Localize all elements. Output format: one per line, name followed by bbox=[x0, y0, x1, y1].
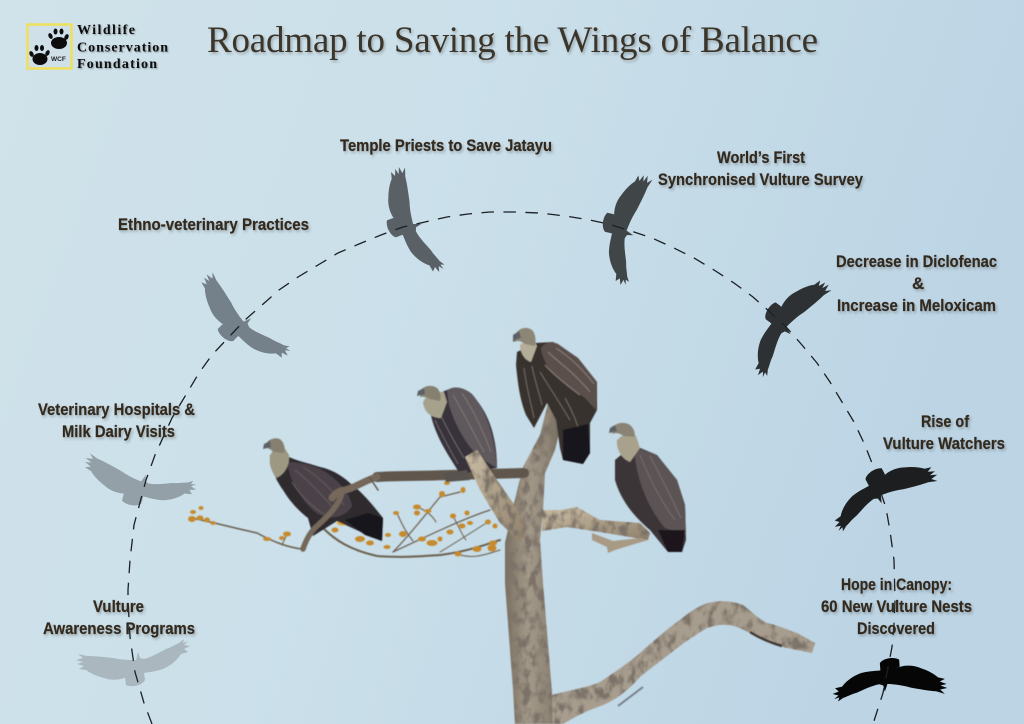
body bbox=[270, 455, 383, 541]
label: Hope in Canopy: Discovered bbox=[857, 619, 935, 638]
flying vulture 1 bbox=[76, 639, 190, 686]
beak bbox=[417, 388, 425, 396]
left horizontal branch bbox=[303, 473, 524, 549]
logo initials: WCF bbox=[51, 56, 66, 63]
wing bbox=[634, 447, 686, 535]
main trunk bbox=[505, 403, 563, 724]
body bbox=[615, 445, 686, 552]
label: Veterinary Hospitals & Milk Dairy Visits: Milk Dairy Visits bbox=[62, 422, 175, 441]
flying vulture 5 bbox=[584, 167, 667, 287]
lower right curved branch bbox=[552, 601, 815, 724]
label: Decrease in Diclofenac & Increase in Meloxicam: Decrease in Diclofenac bbox=[836, 252, 997, 271]
beak bbox=[609, 425, 617, 433]
flying vulture 2 bbox=[76, 439, 199, 527]
flying vulture 6 bbox=[730, 266, 844, 380]
lower fork bbox=[592, 533, 648, 553]
label: Veterinary Hospitals & Milk Dairy Visits: Veterinary Hospitals & bbox=[38, 400, 195, 419]
label: World's First Synchronised Vulture Survey bbox=[658, 148, 863, 189]
tree with perched vultures bbox=[188, 328, 815, 724]
chest streaks bbox=[524, 366, 582, 440]
neck bbox=[520, 336, 537, 362]
tail bbox=[658, 530, 685, 552]
left diagonal dead branch bbox=[465, 450, 527, 542]
label: Ethno-veterinary Practices: Ethno-veterinary Practices bbox=[118, 215, 309, 234]
logo: Wildlife Conservation Foundation bbox=[28, 23, 168, 72]
belly streaks bbox=[435, 416, 464, 464]
label: Vulture Awareness Programs: Vulture bbox=[93, 597, 144, 616]
wing bbox=[287, 462, 352, 517]
label: Vulture Awareness Programs: Awareness Programs bbox=[43, 619, 195, 638]
logo wordmark: Foundation bbox=[77, 57, 157, 72]
title: Roadmap to Saving the Wings of Balance bbox=[207, 20, 818, 61]
beak bbox=[513, 331, 521, 342]
label: Hope in Canopy: 60 New Vulture Nests bbox=[821, 597, 972, 616]
vulture B: centre perched bbox=[417, 386, 497, 482]
dashed flight path bbox=[128, 212, 895, 724]
twigs with autumn leaves bbox=[188, 481, 500, 557]
body bbox=[516, 342, 597, 464]
neck ruff bbox=[270, 447, 289, 478]
flying vulture 7 bbox=[821, 450, 944, 533]
vulture C: top perched bbox=[513, 328, 597, 464]
wing bbox=[541, 342, 597, 410]
neck ruff bbox=[423, 392, 447, 418]
label: Decrease in Diclofenac & Increase in Meloxicam bbox=[836, 252, 997, 315]
flying vulture 8 bbox=[832, 654, 949, 709]
flying vulture 4 bbox=[374, 162, 446, 282]
feather streaks bbox=[545, 348, 594, 395]
label: Decrease in Diclofenac & Increase in Meloxicam: Increase in Meloxicam bbox=[837, 296, 996, 315]
head bbox=[266, 438, 285, 453]
label: Veterinary Hospitals & Milk Dairy Visits bbox=[38, 400, 195, 441]
icon: upper paw print bbox=[47, 28, 70, 49]
feet bbox=[443, 470, 470, 482]
wing bbox=[447, 388, 497, 468]
beak bbox=[263, 441, 271, 449]
vulture D: right perched bbox=[609, 423, 686, 552]
label: Rise of Vulture Watchers: Rise of bbox=[921, 412, 969, 431]
feather streaks bbox=[640, 455, 681, 520]
vulture A: lower left perched bbox=[263, 438, 383, 541]
flying vulture 3 bbox=[186, 261, 293, 380]
neck ruff bbox=[617, 434, 640, 462]
logo wordmark: Conservation bbox=[77, 40, 168, 56]
label: Rise of Vulture Watchers: Vulture Watchers bbox=[883, 434, 1005, 453]
head bbox=[420, 386, 441, 401]
label: Vulture Awareness Programs bbox=[43, 597, 195, 638]
feather streaks bbox=[453, 393, 491, 452]
label: Hope in Canopy bbox=[821, 575, 972, 638]
logo wordmark bbox=[77, 23, 168, 72]
right branch bbox=[542, 507, 650, 553]
label: World's First Synchronised Vulture Survey: Synchronised Vulture Survey bbox=[658, 170, 863, 189]
icon: yellow logo box bbox=[28, 24, 72, 68]
tail bbox=[345, 513, 383, 541]
label: Hope in Canopy: Hope in Canopy: bbox=[841, 575, 952, 594]
head bbox=[514, 328, 536, 346]
label: Rise of Vulture Watchers bbox=[883, 412, 1005, 453]
logo wordmark: Wildlife bbox=[77, 23, 135, 38]
branch shaded underside bbox=[750, 632, 782, 646]
icon: lower paw print bbox=[28, 45, 51, 65]
tail bbox=[563, 424, 590, 464]
head bbox=[612, 423, 635, 437]
label: Temple Priests to Save Jatayu: Temple Priests to Save Jatayu bbox=[340, 136, 552, 155]
label: Decrease in Diclofenac & Increase in Meloxicam: & bbox=[912, 274, 924, 293]
label: World's First Synchronised Vulture Survey: World’s First bbox=[717, 148, 805, 167]
feather streaks bbox=[292, 467, 344, 514]
body bbox=[430, 388, 497, 474]
thorn twig bbox=[618, 687, 643, 706]
